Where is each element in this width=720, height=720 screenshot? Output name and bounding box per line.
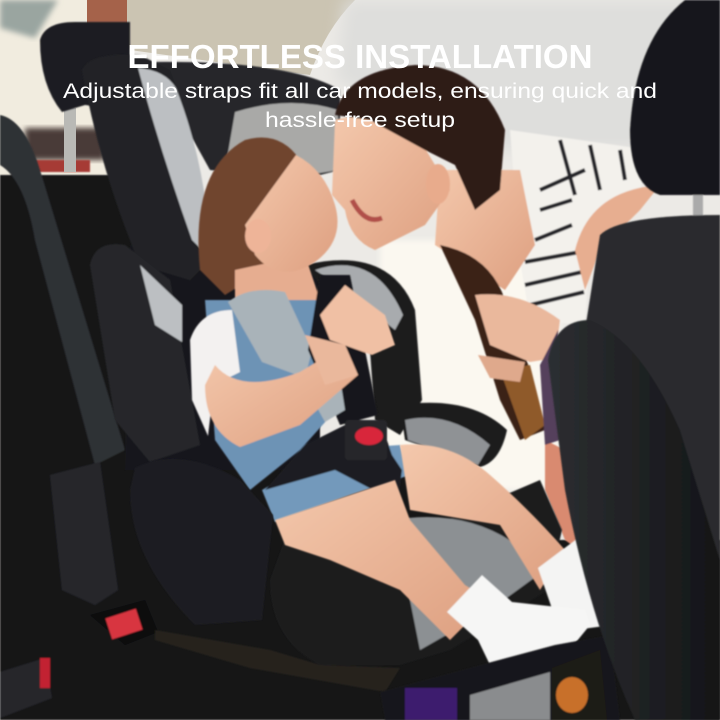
subtitle: Adjustable straps fit all car models, ensuring quick and — [63, 80, 657, 103]
foreground front seat — [548, 0, 720, 720]
child legs and socks — [275, 444, 612, 682]
title: EFFORTLESS INSTALLATION — [128, 38, 592, 75]
subtitle: hassle-free setup — [265, 109, 455, 132]
woman — [332, 65, 660, 560]
storage organiser — [380, 635, 620, 720]
child — [190, 138, 410, 522]
booster seat base — [130, 459, 562, 692]
subtitle — [63, 80, 657, 132]
child seat backrest and headrest — [82, 55, 507, 470]
